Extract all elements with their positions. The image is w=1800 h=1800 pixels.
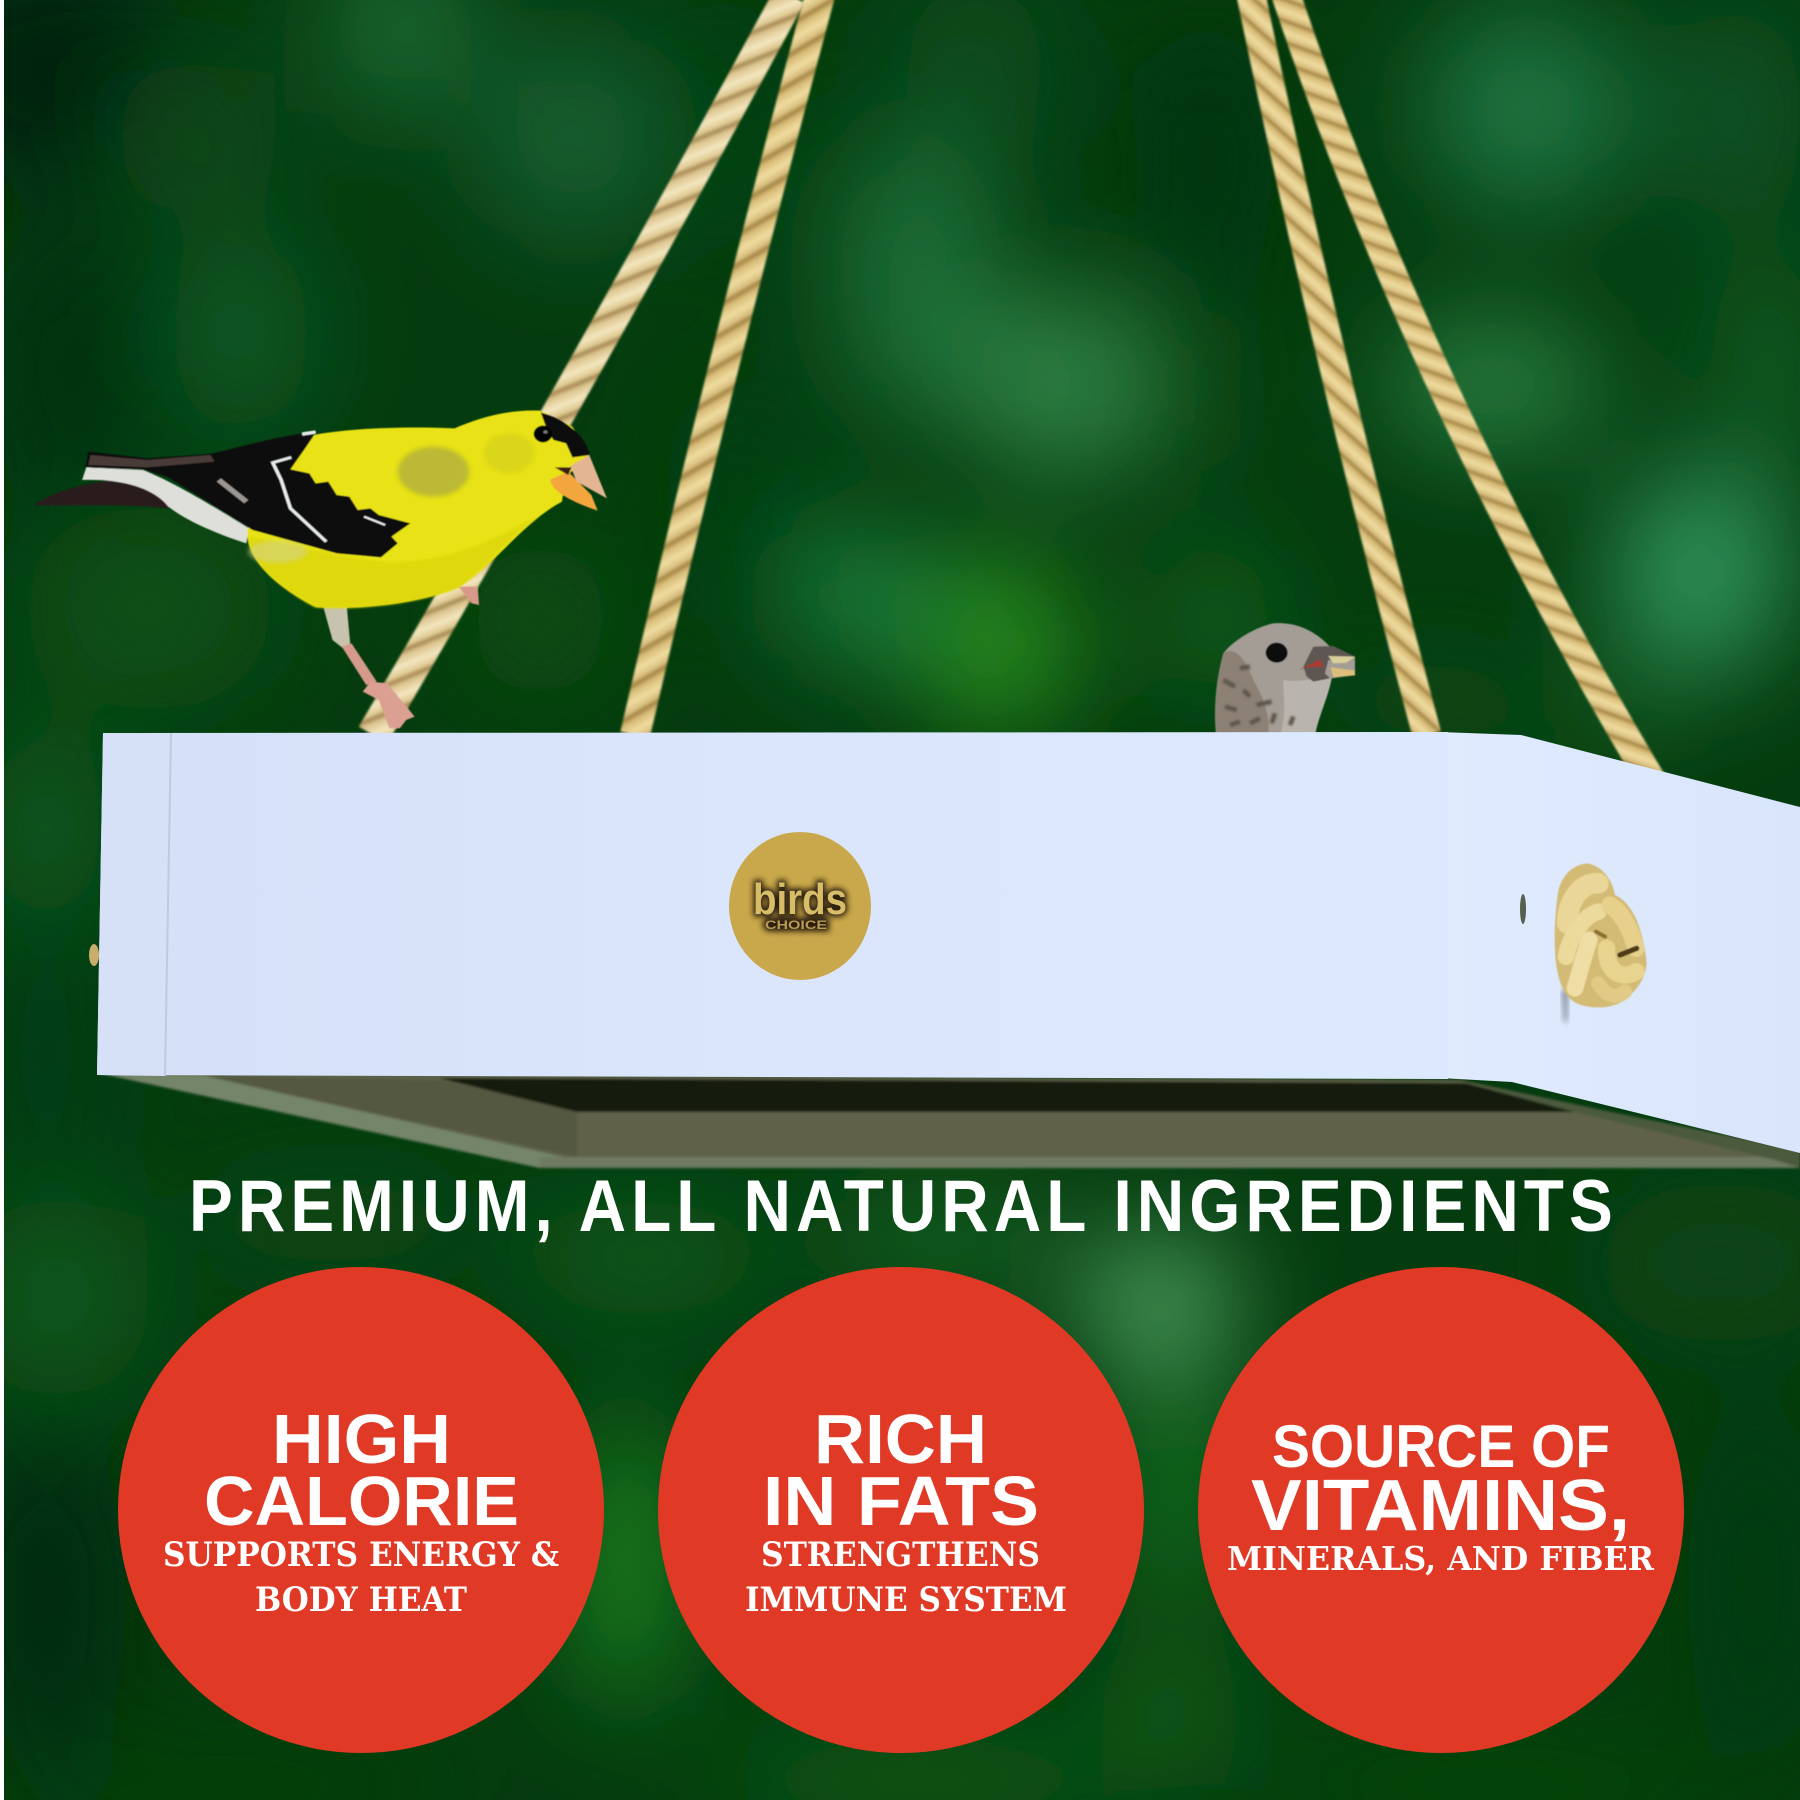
goldfinch beak xyxy=(551,455,607,511)
goldfinch black cap and eye xyxy=(534,413,590,457)
goldfinch legs and feet xyxy=(323,587,479,728)
panel: rich in fats badge: RICH xyxy=(814,1400,987,1478)
gold birds choice badge: birds xyxy=(753,875,847,924)
goldfinch brown tail coverts xyxy=(88,455,215,467)
rope: front right xyxy=(1286,0,1660,795)
underside of the platform feeder xyxy=(98,1073,1800,1168)
goldfinch yellow body xyxy=(247,411,589,608)
goldfinch black wing xyxy=(85,432,410,557)
panel: high calorie badge: HIGH xyxy=(272,1400,451,1478)
heading: PREMIUM, ALL NATURAL INGREDIENTS xyxy=(189,1165,1613,1247)
panel: rich in fats badge: IMMUNE SYSTEM xyxy=(745,1580,1067,1620)
goldfinch neck mottling xyxy=(484,433,535,473)
panel: rich in fats badge: STRENGTHENS xyxy=(761,1535,1040,1575)
gold birds choice badge xyxy=(729,832,871,980)
white left edge strip xyxy=(0,0,4,1800)
rope: front left xyxy=(373,0,790,735)
goldfinch olive back patch xyxy=(398,447,469,497)
panel: source of vitamins badge: VITAMINS, xyxy=(1251,1466,1630,1546)
panel: high calorie badge: CALORIE xyxy=(204,1462,519,1540)
gold birds choice badge: CHOICE xyxy=(765,918,827,932)
rope: back left xyxy=(635,0,820,735)
panel: rich in fats badge xyxy=(658,1267,1144,1753)
panel: high calorie badge: BODY HEAT xyxy=(255,1580,467,1620)
finch mottled feathers xyxy=(1223,667,1293,725)
goldfinch pale belly patch xyxy=(248,540,307,563)
panel: source of vitamins badge xyxy=(1198,1267,1684,1753)
panel: high calorie badge: SUPPORTS ENERGY & xyxy=(163,1535,559,1575)
badge dark halo: CHOICE xyxy=(765,917,827,932)
panel: high calorie badge xyxy=(118,1267,604,1753)
feeder tray xyxy=(97,732,1800,1153)
panel: source of vitamins badge: SOURCE OF xyxy=(1272,1413,1610,1480)
goldfinch white wing bars xyxy=(219,432,385,542)
panel: rich in fats badge: IN FATS xyxy=(763,1462,1039,1540)
small rope end at left of feeder xyxy=(89,944,99,966)
panel: source of vitamins badge: MINERALS, AND FIBER xyxy=(1227,1539,1655,1578)
American goldfinch on the rope xyxy=(34,411,607,728)
goldfinch tail xyxy=(34,478,177,508)
badge dark halo: birds xyxy=(753,875,847,924)
rope knot on the feeder side xyxy=(1520,863,1647,1022)
small grey finch behind the feeder xyxy=(1215,623,1355,735)
rope: back right xyxy=(1251,0,1427,735)
